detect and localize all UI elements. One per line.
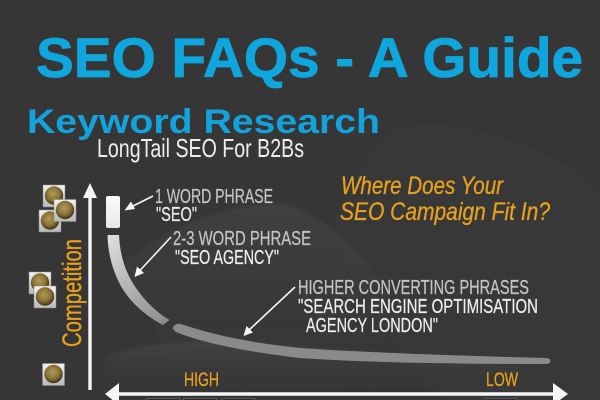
label: two to three word phrase: 2-3 WORD PHRASE (173, 228, 311, 250)
label: one word phrase: "SEO" (156, 204, 197, 226)
label: higher converting phrases (298, 277, 538, 337)
arrow: horizontal axis (105, 383, 568, 400)
label: one word phrase (155, 186, 273, 226)
label: higher converting phrases: AGENCY LONDON" (306, 315, 438, 337)
callout question (340, 172, 550, 226)
curve segment: one word (106, 196, 120, 228)
background soft shapes (104, 123, 600, 400)
arrow: vertical axis (83, 183, 97, 390)
axis label: low: LOW (486, 370, 518, 391)
heading: keyword research: Keyword Research (27, 103, 380, 141)
callout question: Where Does Your (341, 172, 504, 200)
curve segment: long tail (173, 324, 550, 364)
subheading: LongTail SEO For B2Bs (97, 133, 304, 163)
arrow: to higher converting phrases (244, 287, 295, 336)
axis label: high: HIGH (184, 370, 219, 391)
arrow: to two to three word phrase (134, 237, 171, 277)
icon: low competition coin (42, 364, 64, 386)
arrow: to one word phrase (124, 196, 153, 210)
curve segment: two to three words (108, 235, 170, 325)
label: two to three word phrase (173, 228, 311, 269)
axis label: competition: Competition (57, 239, 87, 347)
bottom tabs (147, 398, 517, 400)
label: two to three word phrase: "SEO AGENCY" (175, 247, 279, 269)
title: SEO FAQs - A Guide (36, 26, 583, 89)
callout question: SEO Campaign Fit In? (340, 198, 550, 226)
icons: medium competition coins (29, 272, 56, 308)
icons: high competition coins (39, 185, 76, 232)
label: one word phrase: 1 WORD PHRASE (155, 186, 273, 208)
